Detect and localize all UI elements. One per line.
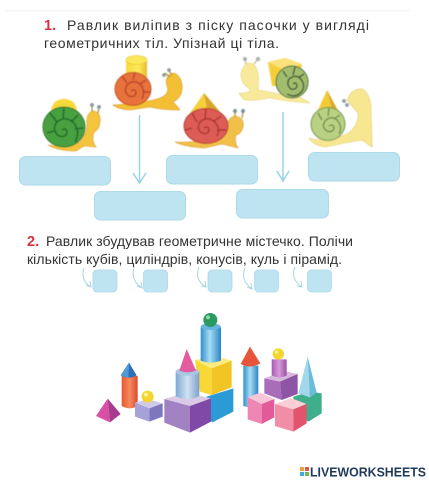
count box: spheres (254, 270, 278, 292)
snail: light green with cone (309, 89, 372, 147)
answer box 4 (94, 192, 186, 220)
tall blue cylinder with green ball (201, 313, 221, 363)
blue cube (207, 388, 233, 422)
lavender cube with yellow ball (135, 391, 163, 422)
heading: task 1: геометричних тіл. Упізнай ці тіла. (44, 35, 279, 51)
heading: task 2: Равлик збудував геометричне містечко. Полічи (46, 233, 353, 249)
purple cube with cylinder and ball (264, 348, 298, 400)
count box: cubes (93, 270, 117, 292)
answer box 1 (20, 156, 110, 185)
count box: pyramids (308, 270, 332, 292)
heading: task 1: 1. (44, 18, 56, 34)
light blue cylinder with pink cone (176, 349, 199, 399)
snail: green with cylinder (43, 99, 101, 151)
arrow: left long arrow (133, 115, 146, 183)
heading: task 2: 2. (27, 234, 39, 250)
heading: task 2: кількість кубів, циліндрів, конусів, куль і пірамід. (27, 251, 342, 267)
large purple cube (164, 393, 211, 433)
red-pink cube (275, 398, 307, 432)
small curved arrows (83, 267, 302, 289)
heading: task 2 (27, 233, 353, 267)
answer box 3 (308, 152, 400, 181)
slim blue cylinder with red cone (241, 347, 260, 407)
top page rule (5, 10, 410, 12)
red cylinder with blue cone (121, 363, 138, 408)
heading: task 1 (44, 17, 369, 51)
geometric town illustration (96, 313, 322, 433)
snail: orange with cylinder (113, 56, 182, 110)
arrow: right long arrow (277, 112, 289, 181)
pink cube (248, 393, 274, 424)
pink pyramid (96, 399, 121, 422)
answer box 5 (236, 190, 328, 218)
answer box 2 (166, 156, 258, 184)
snail: red with cone (175, 93, 245, 148)
green cube (293, 392, 322, 422)
logo: liveworksheets: LIVEWORKSHEETS (310, 464, 426, 480)
heading: task 1: Равлик виліпив з піску пасочки у вигляді (67, 17, 369, 33)
count box: cones (208, 270, 232, 292)
yellow cube (195, 356, 232, 395)
snail: olive with cube (239, 57, 310, 103)
light blue pyramid (298, 357, 317, 397)
count box: cylinders (144, 270, 168, 292)
